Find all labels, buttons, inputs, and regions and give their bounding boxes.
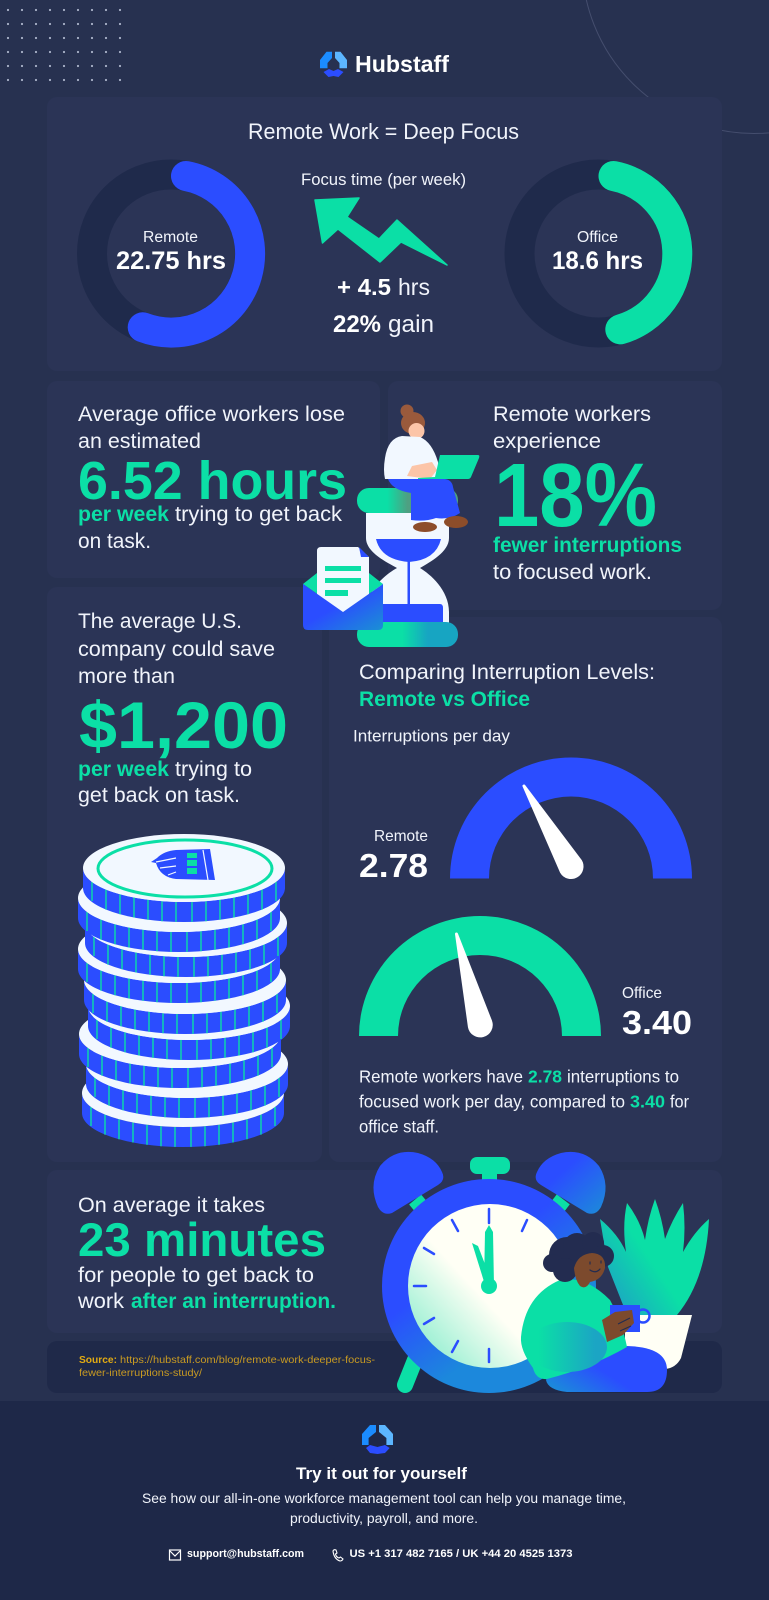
heading: Comparing Interruption Levels: [359, 660, 655, 684]
panel: office workers lose hours [47, 381, 380, 578]
stat: 22 percent gain [333, 311, 434, 338]
panel: company savings: per week [78, 757, 169, 781]
donut chart: office [520, 174, 678, 332]
hourglass [357, 488, 458, 647]
panel: office workers lose hours: per week [78, 502, 169, 526]
gauge: office [359, 916, 692, 1042]
panel: company savings: get back on task. [78, 783, 240, 807]
panel: source: fewer-interruptions-study/ [79, 1367, 202, 1379]
panel: source: https://hubstaff.com/blog/remote-work-deeper-focus- [120, 1354, 376, 1366]
panel: company savings: The average U.S. [78, 609, 242, 633]
panel: office workers lose hours: on task. [78, 529, 151, 553]
alarm clock [373, 1152, 606, 1393]
donut chart: remote [92, 174, 250, 333]
text: gauge summary: 3.40 [630, 1092, 665, 1112]
gauge: remote: Remote [374, 828, 428, 845]
gauge: remote [359, 758, 692, 885]
panel: comparing interruption levels: Remote vs Office [359, 687, 530, 711]
panel: office workers lose hours: Average office workers lose [78, 402, 345, 426]
plant pot [625, 1315, 692, 1369]
stat: plus 4.5 hrs: hrs [398, 274, 430, 300]
panel: fewer interruptions [388, 381, 722, 610]
decorative dot grid [6, 8, 124, 84]
icon: green zigzag arrow [315, 198, 447, 265]
header logo: Hubstaff [355, 51, 449, 77]
gauge: remote: 2.78 [359, 848, 428, 885]
decorative circle arc [582, 0, 769, 134]
donut chart: office: Office [577, 229, 618, 246]
text: gauge summary: for [670, 1092, 689, 1112]
footer [0, 1401, 769, 1600]
footer description: productivity, payroll, and more. [290, 1511, 478, 1526]
panel: remote work deep focus [47, 97, 722, 371]
text: gauge summary: 2.78 [528, 1066, 562, 1086]
big stat: 1,200 dollars: $1,200 [79, 688, 288, 762]
gauge: office: Office [622, 985, 662, 1002]
footer description: See how our all-in-one workforce management tool can help you manage time, [142, 1491, 626, 1506]
panel: source: Source: [79, 1354, 117, 1366]
illustration: hourglass with person and envelope [303, 404, 479, 647]
heading: Remote Work = Deep Focus [248, 119, 519, 144]
panel: office workers lose hours: trying to get back [175, 502, 342, 526]
panel: 23 minutes: for people to get back to [78, 1263, 314, 1287]
person on laptop [384, 404, 479, 532]
panel: 23 minutes [47, 1170, 722, 1333]
panel: comparing interruption levels [329, 617, 722, 1162]
big stat: 18 percent: 18% [494, 446, 657, 546]
panel: office workers lose hours: an estimated [78, 429, 201, 453]
stat: plus 4.5 hrs: + 4.5 [337, 274, 391, 300]
panel: fewer interruptions: Remote workers [493, 402, 651, 426]
footer logo [362, 1425, 393, 1454]
stat: 22 percent gain: gain [388, 311, 434, 338]
text: gauge summary: interruptions to [567, 1066, 679, 1086]
icon: envelope [303, 547, 383, 630]
contact: email: support@hubstaff.com [187, 1548, 304, 1560]
text: gauge summary: focused work per day, compared to [359, 1092, 625, 1112]
contact: phone: US +1 317 482 7165 / UK +44 20 4525 1373 [350, 1548, 572, 1560]
big stat: 6.52 hours: 6.52 hours [78, 451, 347, 511]
illustration: alarm clock with person and plant [373, 1152, 709, 1393]
illustration: coin stack [78, 834, 290, 1147]
text: gauge summary [359, 1066, 689, 1136]
donut chart: remote: 22.75 hrs [116, 247, 226, 275]
subheading: focus time: Focus time (per week) [301, 171, 466, 189]
footer heading: Try it out for yourself [296, 1464, 467, 1483]
panel: 23 minutes: On average it takes [78, 1193, 265, 1217]
panel: fewer interruptions: fewer interruptions [493, 533, 682, 557]
panel: fewer interruptions: experience [493, 429, 601, 453]
panel: comparing interruption levels: Interruptions per day [353, 728, 511, 746]
panel: company savings: company could save [78, 637, 275, 661]
plant [600, 1199, 709, 1315]
panel: 23 minutes: after an interruption. [131, 1289, 336, 1313]
footer description [142, 1491, 626, 1526]
stat: 22 percent gain: 22% [333, 311, 381, 338]
panel: company savings [47, 587, 322, 1162]
big stat: 23 minutes: 23 minutes [78, 1213, 326, 1266]
panel: company savings: more than [78, 664, 175, 688]
stat: plus 4.5 hrs [337, 274, 430, 300]
panel: 23 minutes: work [77, 1289, 124, 1313]
text: gauge summary: Remote workers have [359, 1066, 523, 1086]
seated person with mug [521, 1232, 667, 1392]
panel: company savings: trying to [175, 757, 252, 781]
gauge: office: 3.40 [622, 1005, 692, 1042]
panel: fewer interruptions: to focused work. [493, 560, 652, 584]
donut chart: remote: Remote [143, 229, 198, 246]
donut chart: office: 18.6 hrs [552, 247, 643, 275]
text: gauge summary: office staff. [359, 1116, 439, 1136]
panel: source [47, 1341, 722, 1393]
